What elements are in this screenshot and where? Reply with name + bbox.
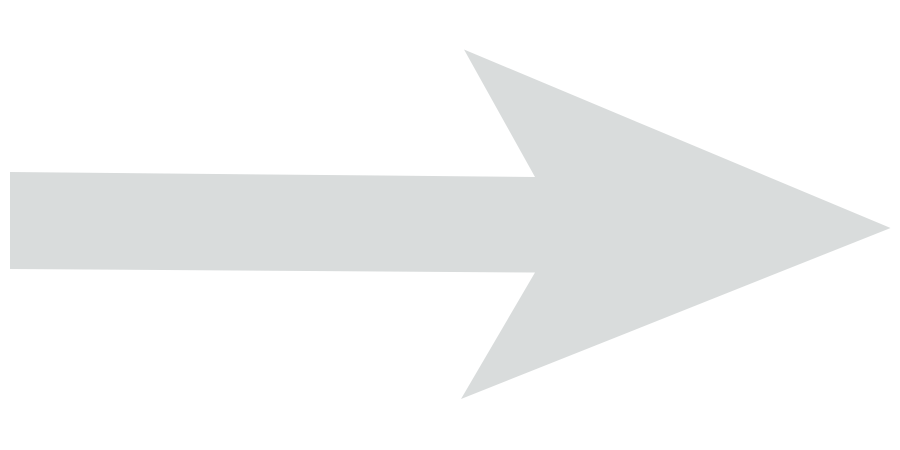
arrow [10,50,890,399]
